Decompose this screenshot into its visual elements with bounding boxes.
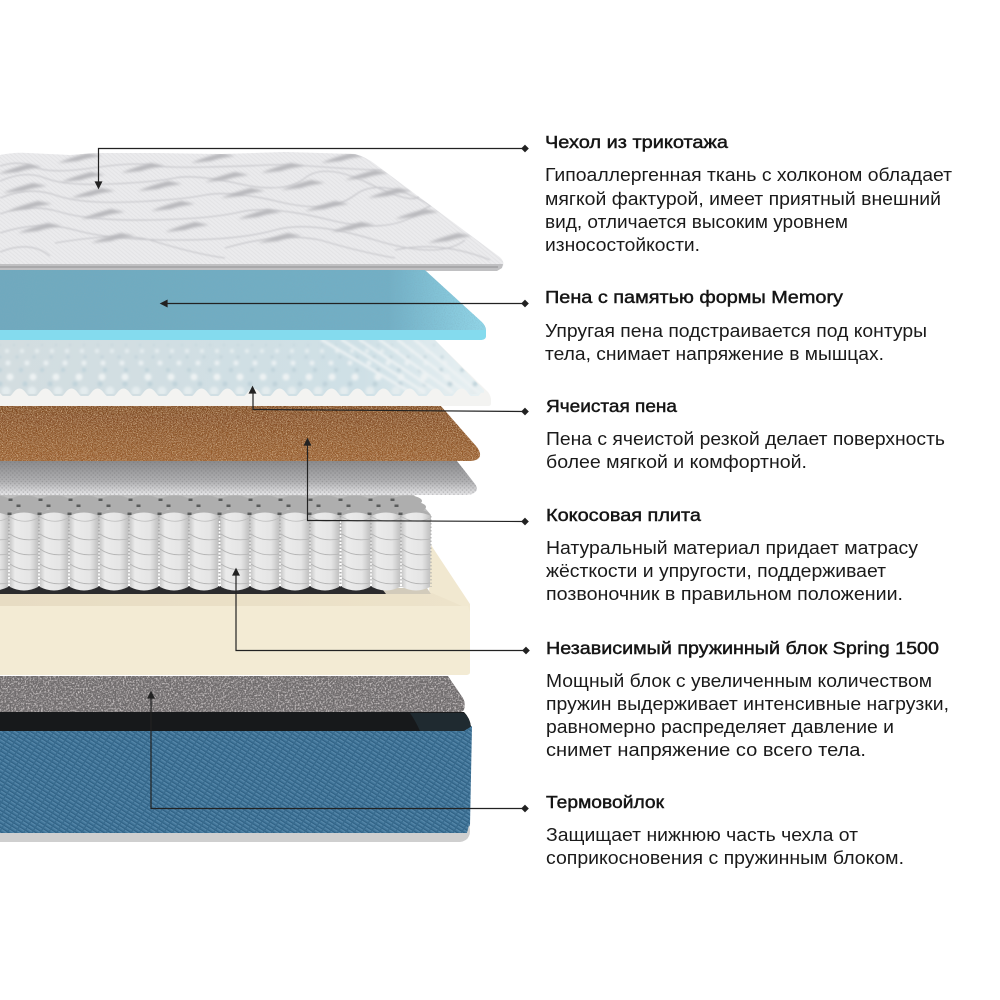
text block: coconut board: позвоночник в правильном положении. — [546, 584, 903, 604]
spring tops: back rows — [0, 496, 430, 520]
quilting wave seams — [0, 153, 490, 260]
spring columns: front row — [0, 512, 431, 590]
layer: coconut board — [0, 406, 480, 461]
text block: memory foam: тела, снимает напряжение в мышцах. — [545, 344, 884, 364]
text block: spring block: Мощный блок с увеличенным количеством — [546, 671, 932, 691]
text block: thermal felt: Защищает нижнюю часть чехла от — [546, 825, 858, 845]
layer: egg-crate cellular foam — [0, 340, 491, 406]
text block: knit cover: вид, отличается высоким уровнем — [545, 212, 848, 232]
layer: grey mesh — [0, 461, 477, 495]
text block: coconut board: Натуральный материал придает матрасу — [546, 538, 918, 558]
text block: thermal felt — [546, 792, 904, 868]
layer: latex cream frame — [0, 545, 470, 675]
text block: memory foam — [545, 287, 927, 364]
leader: coconut board — [304, 439, 528, 524]
heading: memory foam: Пена с памятью формы Memory — [545, 287, 843, 307]
layer: independent spring block — [0, 495, 431, 590]
text block: cellular foam — [546, 396, 945, 472]
quilting tufts — [0, 153, 472, 243]
heading: spring block: Независимый пружинный блок Spring 1500 — [546, 638, 939, 658]
text block: spring block — [546, 638, 949, 760]
heading: thermal felt: Термовойлок — [546, 792, 664, 812]
layer: felt thermal pad — [0, 676, 465, 712]
heading: cellular foam: Ячеистая пена — [546, 396, 677, 416]
text block: knit cover: Гипоаллергенная ткань с холконом обладает — [545, 165, 952, 185]
text block: knit cover: износостойкости. — [545, 235, 700, 255]
leader: thermal felt — [148, 692, 528, 812]
text block: spring block: равномерно распределяет давление и — [546, 717, 894, 737]
text block: coconut board — [546, 505, 918, 604]
foam scalloped front — [0, 388, 491, 406]
text block: memory foam: Упругая пена подстраивается под контуры — [545, 321, 927, 341]
text block: cellular foam: более мягкой и комфортной. — [546, 452, 807, 472]
text block: coconut board: жёсткости и упругости, поддерживает — [546, 561, 886, 581]
heading: coconut board: Кокосовая плита — [546, 505, 701, 525]
leader: memory foam — [161, 300, 528, 306]
foam bump rows — [0, 340, 482, 392]
layer: blue memory foam — [0, 270, 486, 340]
leader: knit cover — [96, 146, 528, 188]
text block: knit cover: мягкой фактурой, имеет приятный внешний — [545, 189, 941, 209]
leader: cellular foam — [250, 387, 528, 414]
layer: dark blue mattress base — [0, 712, 472, 842]
text block: knit cover — [545, 132, 952, 255]
leader: spring block — [233, 569, 529, 654]
text block: cellular foam: Пена с ячеистой резкой делает поверхность — [546, 429, 945, 449]
text block: thermal felt: соприкосновения с пружинным блоком. — [546, 848, 904, 868]
text block: spring block: снимет напряжение со всего тела. — [546, 740, 866, 760]
text block: spring block: пружин выдерживает интенсивные нагрузки, — [546, 694, 949, 714]
layer: white quilted knit cover — [0, 152, 503, 271]
heading: knit cover: Чехол из трикотажа — [545, 132, 728, 152]
